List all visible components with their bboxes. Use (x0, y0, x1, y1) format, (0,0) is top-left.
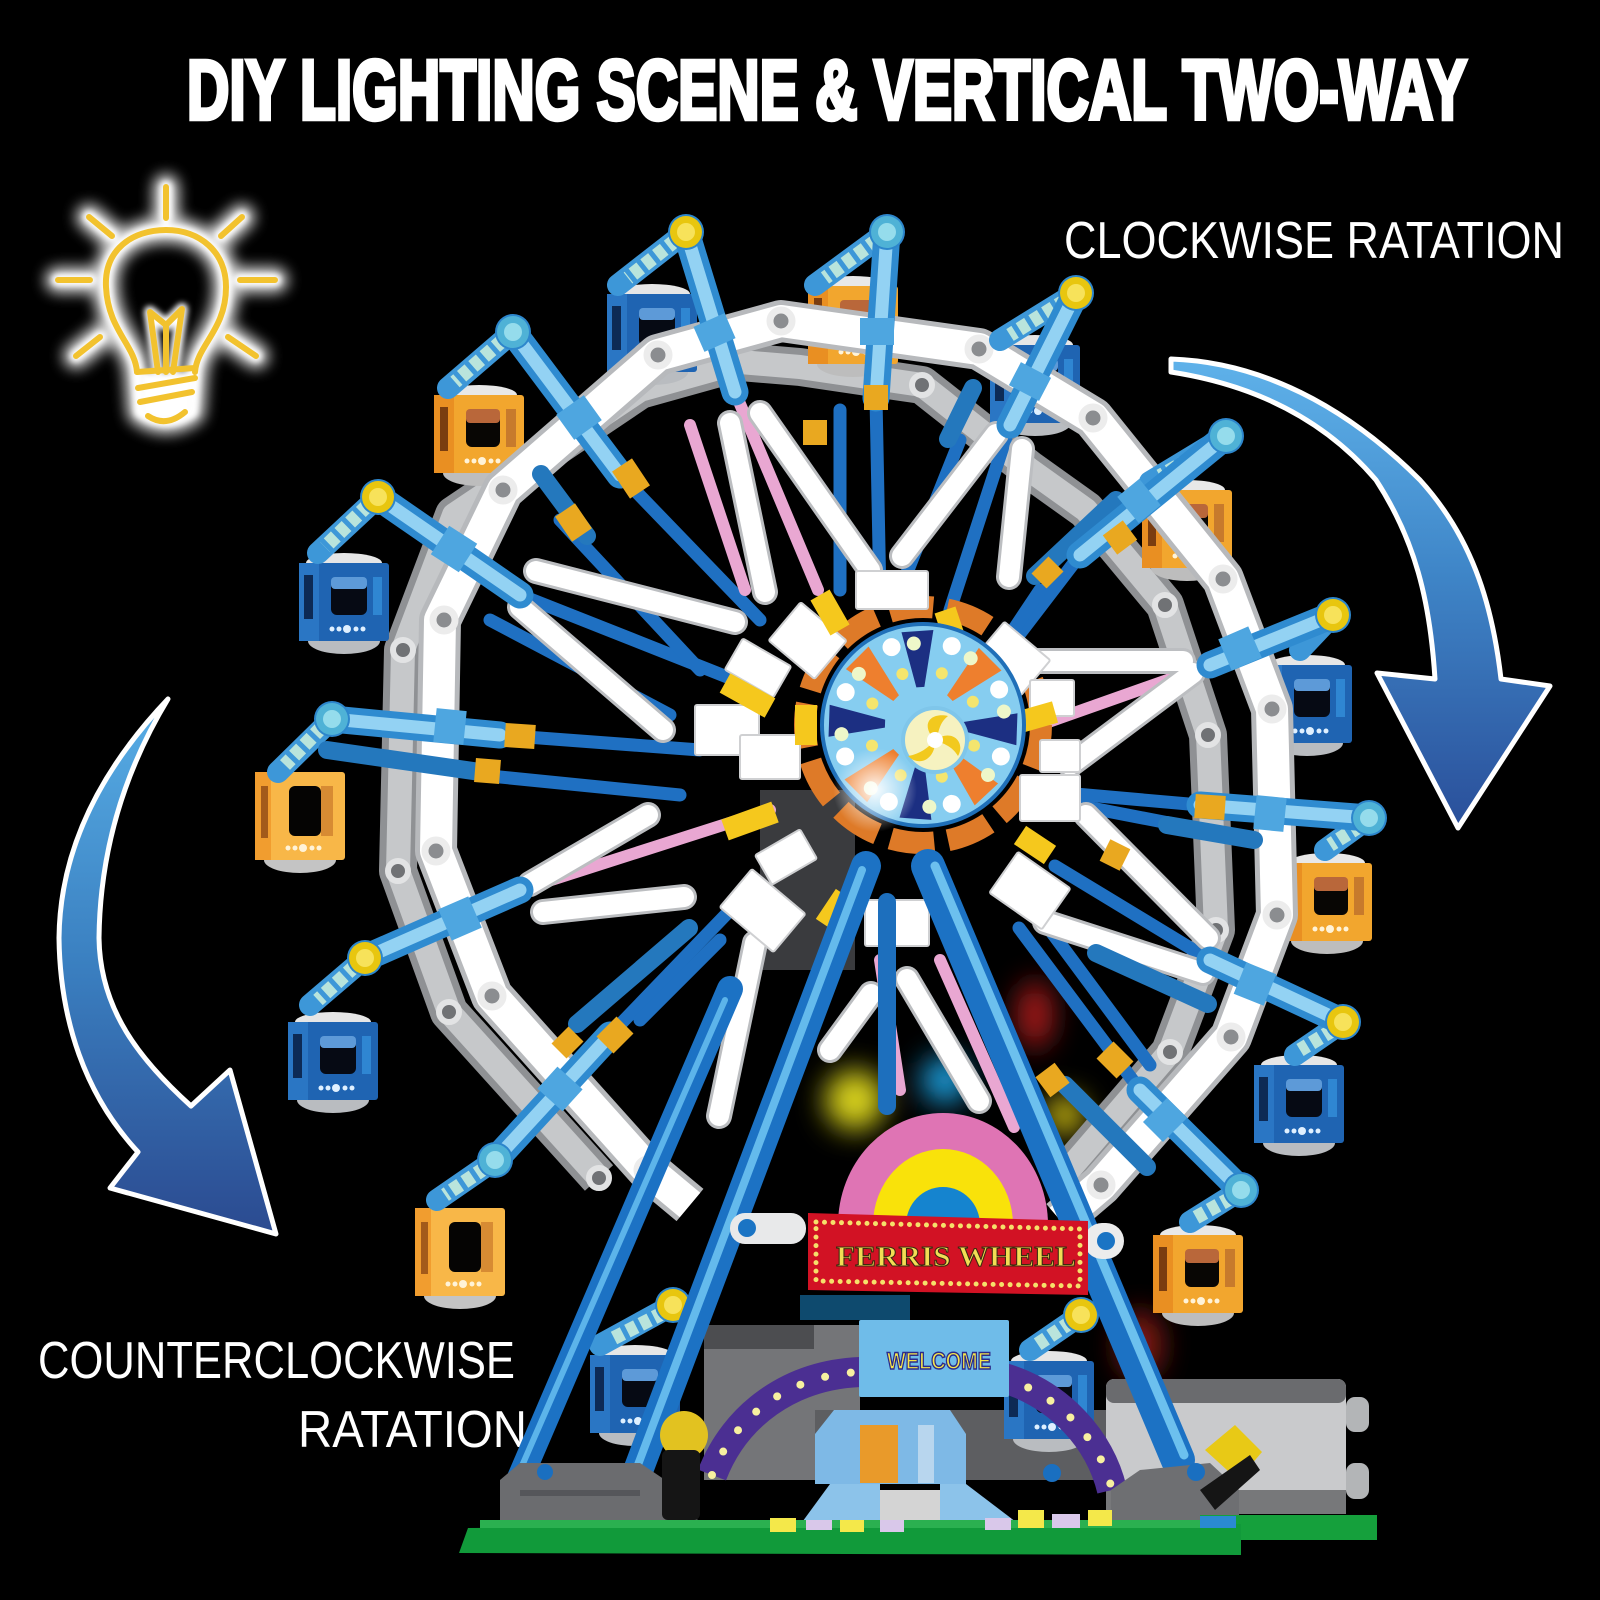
amber connectors (475, 385, 1225, 1090)
icon: glowing light bulb (58, 187, 275, 421)
label: counterclockwise rotation (38, 1332, 527, 1459)
rim clamps (435, 318, 1285, 1130)
gondolas (255, 276, 1372, 1452)
flower tiles (770, 1510, 1236, 1532)
arrow: counterclockwise (59, 699, 276, 1234)
gondola hangers (278, 232, 1369, 1350)
label: counterclockwise rotation: COUNTERCLOCKWISE (38, 1332, 515, 1390)
grey gearbox (704, 1295, 1115, 1480)
sign: welcome: WELCOME (887, 1348, 991, 1375)
baseplates (459, 1515, 1377, 1555)
ferris wheel model (255, 214, 1387, 1555)
sign: ferris wheel (808, 1213, 1088, 1295)
thin spokes (480, 392, 1210, 1127)
back rim (388, 362, 1226, 1188)
hub disc (820, 622, 1026, 832)
kiosk (800, 1410, 1020, 1525)
purple arches (712, 1372, 1112, 1490)
light glows (825, 981, 1162, 1379)
sign: ferris wheel: FERRIS WHEEL (836, 1241, 1076, 1273)
arrow: clockwise (1171, 359, 1550, 828)
lamps (660, 1411, 1262, 1520)
battery box (1106, 1379, 1369, 1514)
sign: welcome (859, 1320, 1009, 1397)
rainbow arch (838, 1113, 1048, 1225)
front rim (425, 310, 1288, 1220)
arm end caps (314, 214, 1387, 1333)
hub ring and connectors (695, 571, 1080, 952)
A-frame legs (518, 866, 1184, 1484)
arms (327, 232, 1369, 1190)
connector bars (730, 1213, 1124, 1259)
stone bases (500, 1463, 1239, 1524)
central grey mechanism (760, 790, 855, 970)
label: counterclockwise rotation: RATATION (298, 1401, 527, 1459)
